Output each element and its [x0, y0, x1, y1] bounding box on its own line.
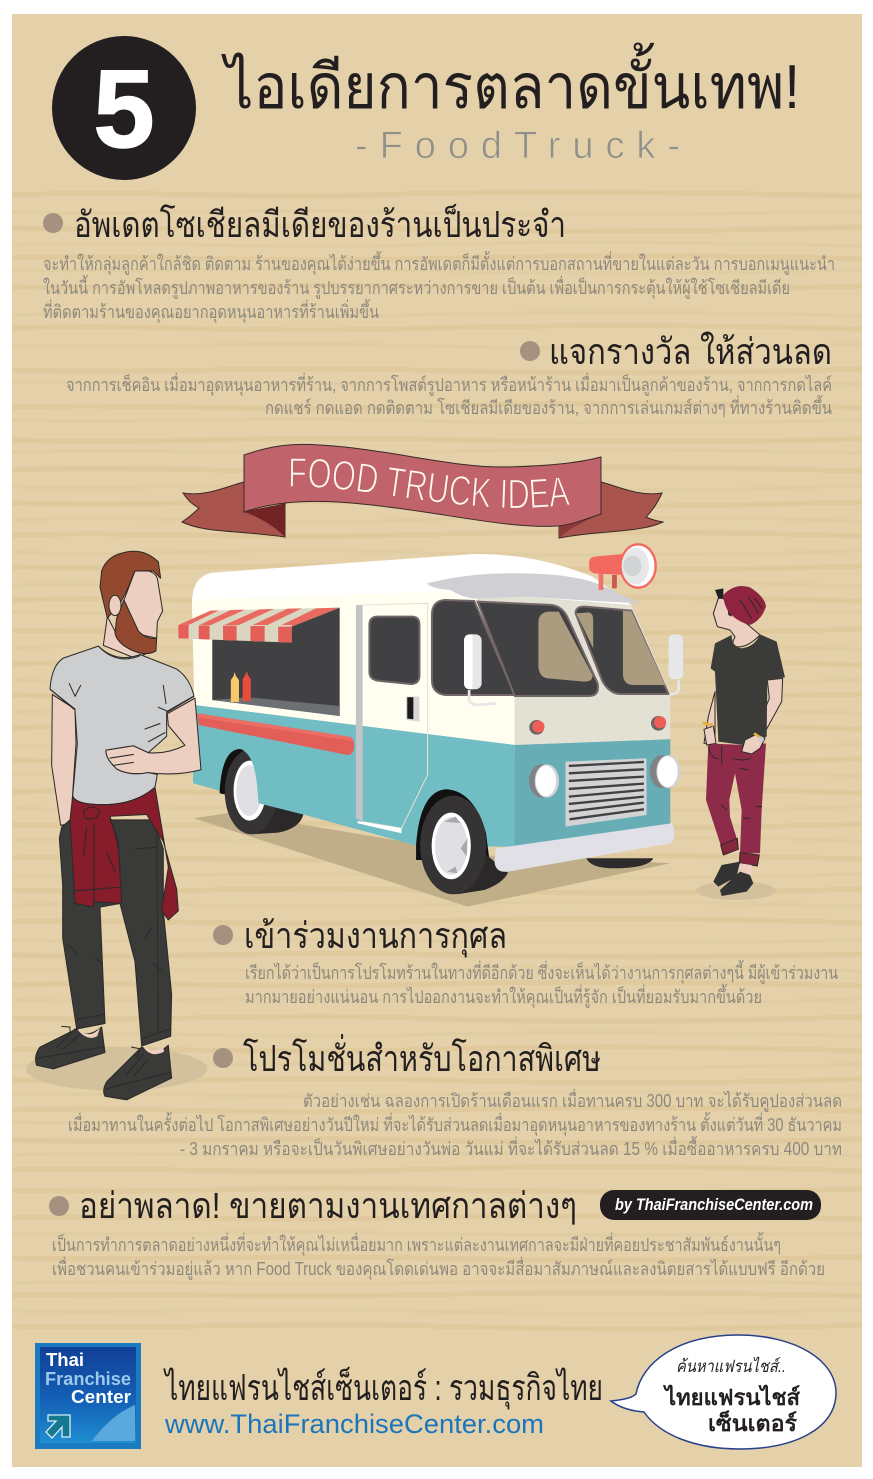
- section 5: festivals: [49, 1185, 825, 1280]
- speech bubble: ค้นหาแฟรนไชส์..: [676, 1356, 786, 1376]
- title: ไอเดียการตลาดขั้นเทพ!: [220, 42, 800, 122]
- side red stripe: [197, 713, 354, 755]
- neck: [103, 616, 148, 658]
- pocket lines: [708, 747, 762, 818]
- credit pill: [600, 1190, 821, 1220]
- badge: number 5: 5: [93, 48, 155, 171]
- rear wheel: [220, 727, 417, 846]
- truck ground shadow: [194, 813, 670, 907]
- sweater folds: [75, 807, 157, 902]
- logo: Thai Franchise Center: Franchise: [45, 1369, 131, 1389]
- section 3: charity events: มากมายอย่างแน่นอน การไปออกงานจะทำให้คุณเป็นที่รู้จัก เป็นที่ยอมรับมากขึ้นด้วย: [245, 984, 762, 1008]
- indicator lights: [529, 716, 666, 735]
- teal side: [193, 705, 516, 847]
- section 4: special occasion promotions: [68, 1034, 842, 1159]
- arms: [52, 694, 201, 825]
- hands: [704, 726, 765, 754]
- speech bubble: เซ็นเตอร์: [708, 1409, 797, 1436]
- teal front: [515, 739, 670, 848]
- serving window: [212, 608, 340, 716]
- ear: [109, 595, 121, 616]
- awning: [178, 608, 340, 643]
- logo: Thai Franchise Center: Center: [71, 1386, 131, 1407]
- truck cream side: [192, 591, 515, 745]
- truck roof: [192, 554, 631, 613]
- left man illustration: [26, 551, 207, 1100]
- logo: Thai Franchise Center: [35, 1343, 141, 1449]
- face and neck: [713, 598, 760, 647]
- black t-shirt: [711, 634, 785, 745]
- credit pill: by ThaiFranchiseCenter.com: [615, 1195, 813, 1214]
- section 5: festivals: อย่าพลาด! ขายตามงานเทศกาลต่างๆ: [79, 1185, 577, 1226]
- hair: [100, 551, 161, 618]
- trousers: [59, 820, 172, 1046]
- door: [356, 603, 428, 833]
- sauce bottles: [231, 671, 251, 702]
- ground shadow: [26, 1047, 207, 1091]
- icon: logo arrow: [46, 1415, 70, 1438]
- head: [123, 570, 163, 638]
- logo: Thai Franchise Center: Thai: [46, 1349, 84, 1370]
- beard: [115, 600, 157, 654]
- speech bubble: [611, 1335, 836, 1449]
- section 1: social media: [43, 202, 835, 323]
- roof hatch: [427, 573, 640, 603]
- footer url: www.ThaiFranchiseCenter.com: [164, 1409, 544, 1439]
- section 4: special occasion promotions: โปรโมชั่นสำหรับโอกาสพิเศษ: [243, 1034, 601, 1079]
- section 1: social media: ที่ติดตามร้านของคุณอยากอุดหนุนอาหารที่ร้านเพิ่มขึ้น: [43, 299, 379, 323]
- front bumper: [494, 823, 675, 872]
- footer heading: ไทยแฟรนไชส์เซ็นเตอร์ : รวมธุรกิจไทย: [163, 1365, 603, 1410]
- bracelet and watch: [703, 723, 764, 742]
- section 2: rewards and discounts: แจกรางวัล ให้ส่วนลด: [549, 331, 832, 372]
- right man illustration: [696, 586, 785, 900]
- shoes: [36, 1027, 172, 1100]
- speech bubble: ไทยแฟรนไชส์: [663, 1384, 801, 1410]
- front wheel: [416, 789, 508, 894]
- arms: [704, 678, 783, 753]
- tied sweater: [70, 787, 178, 920]
- subtitle: -FoodTruck-: [355, 125, 680, 167]
- front grille: [565, 758, 647, 827]
- food truck illustration: [178, 544, 683, 907]
- truck windows: [432, 600, 669, 696]
- ribbon banner: [181, 444, 664, 539]
- beanie: [723, 586, 766, 625]
- headlights: [529, 755, 681, 798]
- ground shadow: [696, 881, 776, 900]
- cuffs: [721, 838, 759, 866]
- shoes: [713, 862, 753, 896]
- section 2: rewards and discounts: [66, 331, 832, 418]
- megaphone: [589, 544, 656, 590]
- ankles: [78, 1028, 164, 1054]
- t-shirt folds: [51, 646, 193, 765]
- trousers: [706, 743, 766, 853]
- badge: number 5: [52, 36, 196, 180]
- shoe laces: [38, 1026, 170, 1089]
- truck front panel: [474, 593, 670, 745]
- hair: [727, 606, 732, 617]
- side mirrors: [464, 634, 683, 705]
- ankle: [740, 863, 752, 877]
- banner title: FOOD TRUCK IDEA: [290, 458, 570, 508]
- windscreen reflections: [538, 611, 665, 685]
- section 3: charity events: เข้าร่วมงานการกุศล: [244, 915, 507, 958]
- section 1: social media: อัพเดตโซเชียลมีเดียของร้านเป็นประจำ: [74, 202, 566, 245]
- far wheel: [586, 858, 653, 868]
- trouser creases: [67, 831, 170, 1039]
- t-shirt: [50, 646, 194, 805]
- cap: [715, 588, 723, 598]
- section 3: charity events: [213, 915, 838, 1008]
